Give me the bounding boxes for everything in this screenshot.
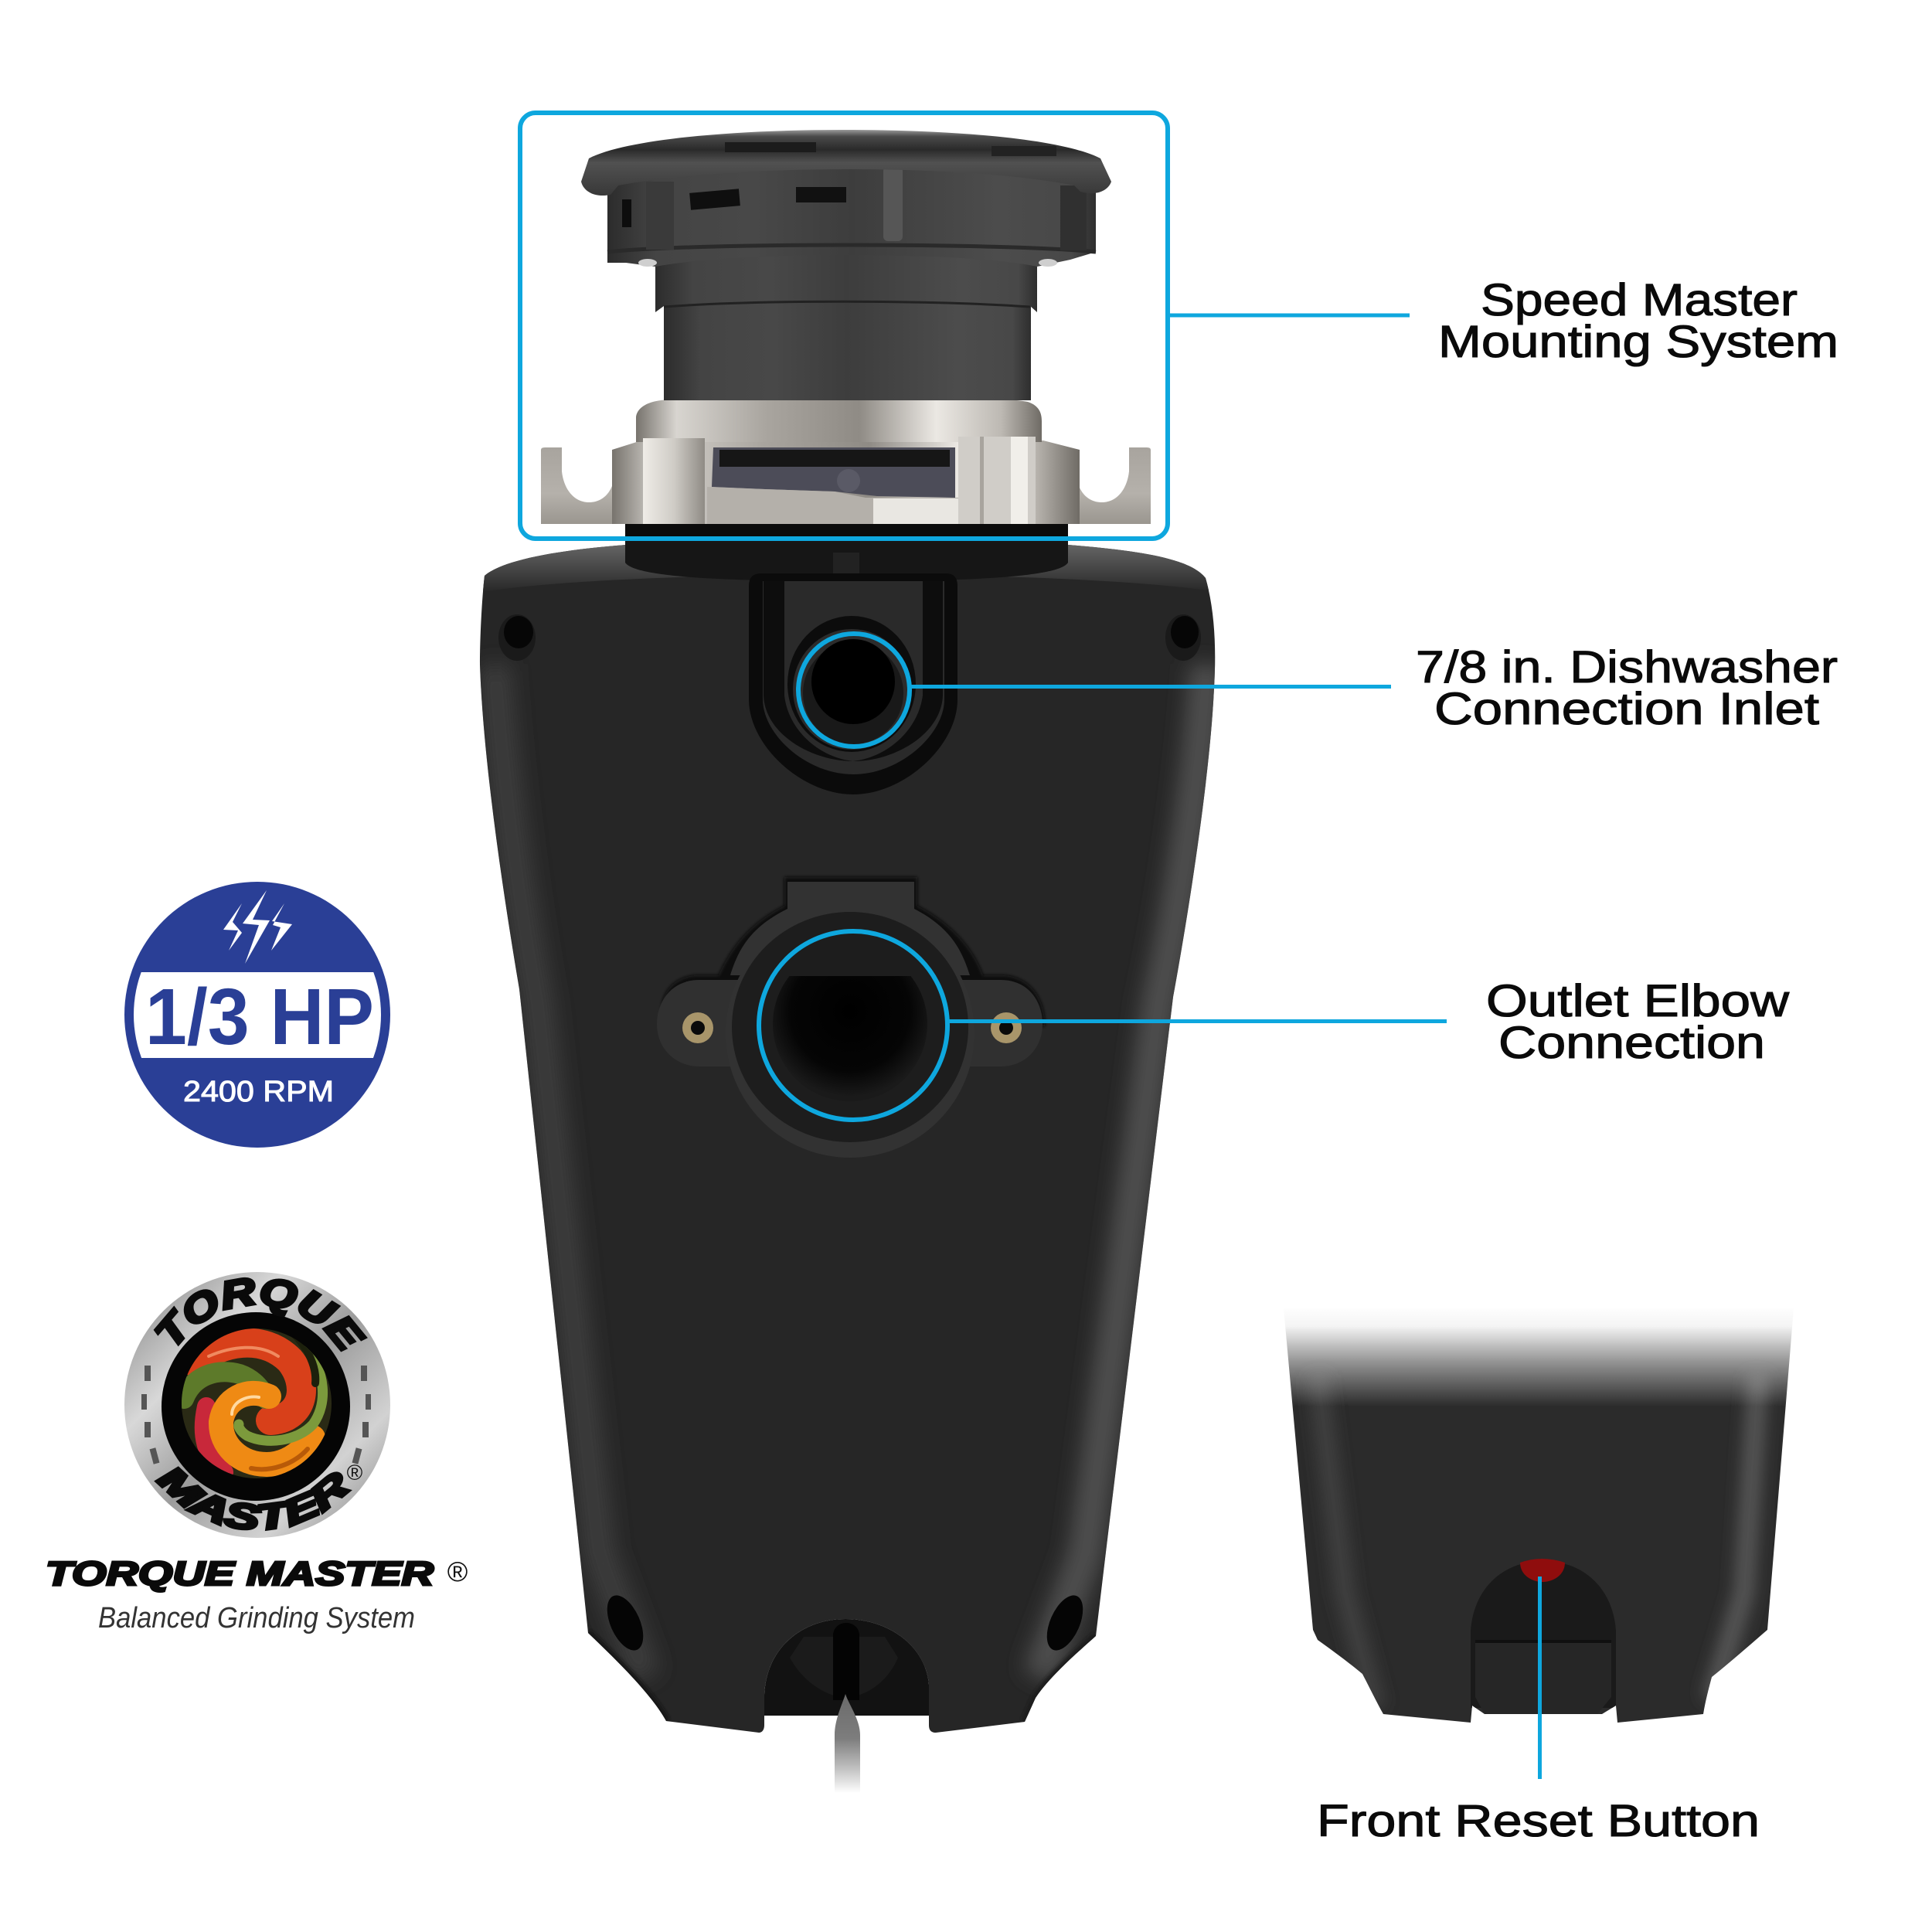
cord recess arch (764, 1619, 929, 1716)
hole outer rim (787, 616, 916, 752)
left screw (682, 1012, 713, 1043)
callout: mounting box highlight (520, 113, 1168, 539)
upper left mounting hole (498, 614, 536, 661)
disposal body (471, 541, 1229, 1733)
collar ribs and slots (622, 166, 1087, 250)
label: Speed Master Mounting System: Speed Master (1481, 275, 1798, 325)
window pin (837, 469, 860, 492)
callout line: inlet (910, 685, 1391, 689)
lid dark tabs (725, 142, 1056, 156)
callout ring: outlet (759, 931, 947, 1120)
right screw (991, 1012, 1022, 1043)
callout line: outlet (947, 1019, 1447, 1023)
outlet right ear (927, 980, 1043, 1066)
logo swirl (182, 1328, 332, 1478)
body shell (480, 545, 1215, 1733)
left side facet highlight (495, 665, 645, 1677)
inset right facet (1712, 1376, 1758, 1700)
silver lip (707, 487, 958, 524)
tagline: Balanced Grinding System (98, 1602, 415, 1634)
red reset button (1520, 1559, 1565, 1582)
wordmark registered mark: ® (447, 1556, 468, 1587)
outlet shadow outline (662, 877, 1045, 1026)
upper neck (655, 249, 1037, 312)
wordmark: TORQUE MASTER (46, 1555, 434, 1593)
lower right hole (1039, 1590, 1090, 1655)
label: Dishwasher inlet: 7/8 in. Dishwasher (1416, 642, 1838, 692)
inlet recess (749, 573, 957, 794)
right side facet highlight (1039, 665, 1207, 1677)
label: Outlet elbow: Outlet Elbow (1486, 976, 1790, 1026)
inset top fade (1271, 1306, 1812, 1406)
callout ring: inlet (798, 634, 910, 747)
silver ring (636, 397, 1042, 442)
logo registered mark: ® (347, 1461, 363, 1485)
logo arc text (153, 1277, 368, 1532)
lower left hole (600, 1590, 651, 1655)
silver bracket right (958, 437, 1036, 524)
label: Dishwasher inlet: Connection Inlet (1434, 684, 1819, 734)
reset recess arch (1471, 1561, 1616, 1708)
window (712, 447, 955, 498)
label: Speed Master Mounting System: Mounting System (1438, 317, 1838, 367)
lid flange (581, 130, 1111, 196)
silver bracket left (643, 438, 705, 524)
inset left facet (1318, 1376, 1376, 1708)
lower neck (664, 294, 1031, 400)
badge circle (124, 882, 390, 1148)
label: Front Reset Button: Front Reset Button (1317, 1796, 1760, 1846)
badge: 1/3 HP 2400 RPM (124, 882, 391, 1148)
logo: Torque Master (46, 1272, 468, 1634)
callout line: reset (1538, 1577, 1542, 1779)
black sink ring (625, 524, 1068, 581)
logo arc text: TORQUE (153, 1277, 368, 1352)
badge heading: 1/3 HP (145, 972, 374, 1061)
screws beneath collar (638, 259, 1057, 267)
outlet elbow port (657, 877, 1045, 1158)
logo black ring (162, 1312, 350, 1501)
hole (803, 642, 903, 744)
outlet top tab (730, 882, 970, 975)
lower dark facet edges (588, 1633, 666, 1721)
left hook (541, 447, 614, 524)
mounting assembly (541, 130, 1151, 581)
silver base (612, 440, 1080, 524)
inset body (1285, 1321, 1793, 1723)
power cord (835, 1694, 860, 1793)
reset button inset (1271, 1306, 1812, 1779)
label: Outlet elbow: Connection (1498, 1018, 1765, 1068)
reset recess lower panel (1475, 1641, 1611, 1714)
badge white band (124, 972, 391, 1058)
icon: lightning bolts (223, 890, 292, 964)
upper right mounting hole (1165, 614, 1201, 661)
top cap shading (483, 545, 1209, 591)
outlet hole interior (773, 976, 927, 1090)
outlet inner ring (732, 912, 968, 1142)
collar (607, 158, 1096, 267)
outlet left ear (657, 980, 773, 1066)
callout line: mounting (1168, 314, 1410, 317)
badge subtext: 2400 RPM (183, 1076, 334, 1108)
logo metal ring (124, 1272, 390, 1538)
logo arc text: MASTER (154, 1466, 352, 1532)
recess outer (749, 573, 957, 794)
right hook (1077, 447, 1151, 524)
recess side strips (764, 581, 853, 761)
window black slot (719, 450, 950, 467)
recess plate (763, 581, 944, 774)
logo side dashes (141, 1366, 371, 1464)
outlet flange (726, 909, 975, 1158)
